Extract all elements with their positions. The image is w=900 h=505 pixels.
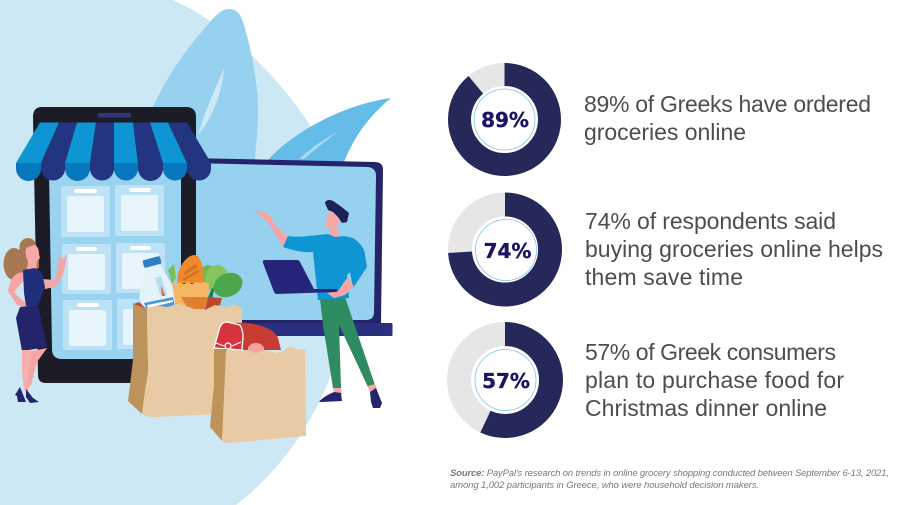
hair (4, 238, 39, 280)
dress top (23, 268, 45, 306)
meat slice (205, 297, 222, 310)
icon: small leaf (268, 98, 391, 162)
arm on hip (8, 272, 28, 307)
head and neck (26, 245, 40, 271)
donut chart: 89% (460, 74, 550, 164)
shoes (15, 387, 26, 402)
carrot top (168, 264, 176, 284)
legs (22, 350, 32, 391)
hair (325, 200, 349, 223)
shopping bag: back (128, 255, 246, 417)
source note: Source: PayPal's research on trends in online grocery shopping conducted between September 6-13, 2021, (450, 468, 889, 479)
raised arm (42, 254, 67, 289)
statement: 89%: groceries online (584, 119, 746, 145)
skirt (16, 305, 47, 351)
product tiles (61, 185, 166, 350)
herbs on bag edge (134, 302, 147, 309)
laptop (190, 158, 392, 336)
pointing arm (254, 210, 288, 247)
statement: 74%: buying groceries online helps (585, 236, 883, 262)
stat row: 57% (459, 334, 844, 426)
bread slice (181, 297, 208, 309)
ankles (333, 384, 377, 394)
statement: 74%: them save time (585, 264, 743, 290)
tablet slot (98, 113, 131, 118)
head (326, 212, 340, 238)
statement: 74%: 74% of respondents said (585, 208, 836, 234)
donut chart: 74%: 74% (484, 239, 531, 263)
bread (177, 255, 204, 283)
steak (214, 322, 281, 355)
statement: 57%: plan to purchase food for (585, 367, 844, 393)
stat row: 74% (460, 204, 883, 294)
donut chart: 57%: 57% (482, 369, 530, 393)
icon: large leaf (153, 9, 258, 160)
donut chart: 57% (459, 334, 551, 426)
lettuce (201, 265, 246, 302)
panel: statistics (459, 74, 883, 426)
shoes (319, 392, 342, 402)
woman (4, 238, 67, 403)
panel: illustration (0, 0, 392, 505)
bag front (222, 346, 306, 443)
trousers (320, 297, 375, 388)
awning (16, 122, 211, 181)
statement: 57%: Christmas dinner online (585, 395, 827, 421)
notebook (263, 260, 337, 294)
donut chart: 89%: 89% (481, 108, 529, 132)
source note: among 1,002 participants in Greece, who were household decision makers. (450, 480, 759, 491)
tablet storefront (33, 107, 196, 383)
background blob (0, 0, 342, 505)
sweater (283, 234, 367, 300)
paper wrap (172, 282, 209, 309)
stat row: 89% (460, 74, 871, 164)
bottle (139, 256, 177, 310)
statement: 89%: 89% of Greeks have ordered (584, 91, 871, 117)
man (254, 200, 382, 408)
bag side (128, 303, 148, 414)
hand at waist (327, 278, 354, 298)
statement: 57%: 57% of Greek consumers (585, 339, 836, 365)
shopping bag: front (210, 322, 306, 443)
donut chart: 74% (460, 204, 550, 294)
bag side (210, 349, 227, 442)
bag front (142, 304, 242, 417)
